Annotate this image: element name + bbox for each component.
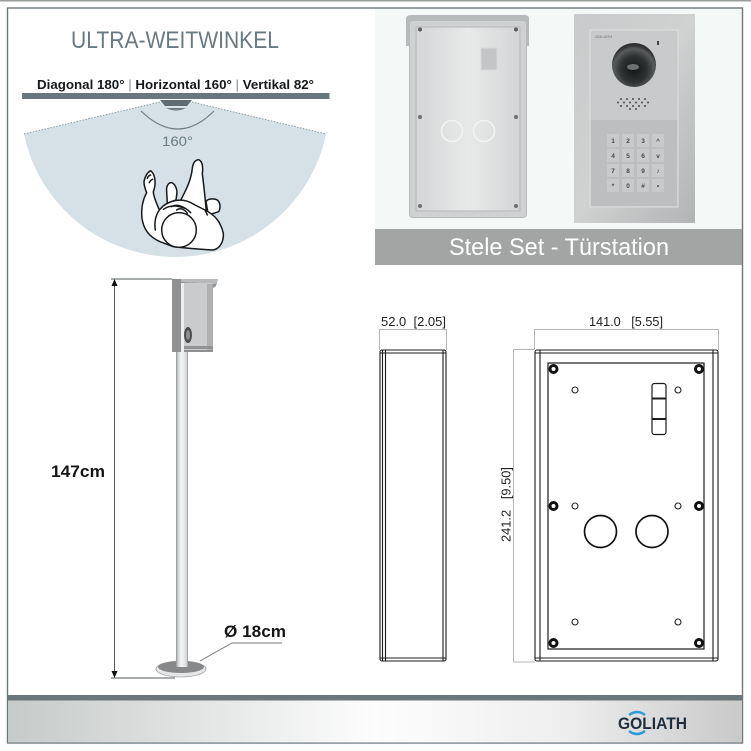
keypad: 4	[611, 153, 615, 160]
keypad: ^	[656, 137, 660, 145]
keypad: 9	[641, 168, 645, 175]
keypad: •	[657, 183, 660, 190]
logo: GOLIATH	[618, 714, 687, 733]
keypad: 5	[626, 153, 630, 160]
width label: 52.0 [2.05]	[381, 314, 446, 329]
top edge line	[0, 0, 751, 2]
keypad: #	[641, 183, 645, 190]
base plate	[156, 652, 206, 677]
keypad: 3	[641, 138, 645, 145]
status led	[657, 41, 659, 45]
dotted field of view edges	[24, 102, 326, 134]
keypad: 0	[626, 183, 630, 190]
speaker	[617, 98, 649, 110]
caption band	[375, 229, 742, 265]
height label: 147cm	[51, 463, 105, 481]
caption band: Stele Set - Türstation	[449, 234, 669, 261]
camera lens	[612, 43, 656, 87]
brand mark: GOLIATH	[595, 34, 612, 39]
keypad: ♪	[656, 168, 660, 175]
title: ULTRA-WEITWINKEL	[71, 27, 279, 54]
height label: 241.2 [9.50]	[498, 467, 514, 542]
footer gradient	[8, 700, 742, 742]
diameter label: Ø 18cm	[224, 623, 286, 641]
keypad: 6	[641, 153, 645, 160]
panel: side view drawing	[380, 314, 446, 661]
small holes	[572, 387, 681, 625]
pole	[176, 352, 188, 670]
cable slot	[652, 384, 666, 434]
angle arc	[141, 111, 214, 129]
photo panel background	[375, 8, 742, 229]
angle label: 160°	[162, 133, 193, 149]
housing outline	[535, 350, 718, 661]
diameter leader	[200, 643, 282, 661]
front panel photo	[574, 14, 695, 223]
camera icon	[160, 100, 192, 110]
panel: ultra wide angle	[22, 27, 330, 257]
viewing angles text: Diagonal 180° | Horizontal 160° | Vertikal 82°	[37, 77, 314, 92]
width dimension lines	[380, 330, 446, 350]
mounted housing	[172, 279, 218, 352]
footer dark band	[8, 695, 742, 700]
side outline	[380, 350, 446, 661]
mounting screws	[550, 366, 702, 646]
back housing photo	[406, 15, 529, 218]
cable holes	[584, 516, 668, 548]
field of view sector	[24, 102, 326, 257]
height dimension	[111, 279, 175, 678]
keypad: v	[656, 153, 660, 160]
dimension lines	[514, 330, 718, 662]
panel: front view drawing	[498, 314, 718, 662]
keypad: 1	[611, 138, 615, 145]
panel: door station photos	[375, 14, 742, 265]
keypad: 7	[611, 168, 615, 175]
wall bar	[22, 93, 330, 99]
width label: 141.0 [5.55]	[589, 314, 663, 329]
keypad	[607, 134, 664, 192]
icon: person from above	[142, 160, 223, 250]
footer	[8, 695, 742, 742]
keypad: 2	[626, 138, 630, 145]
keypad: *	[612, 183, 615, 190]
panel: pole with dimensions	[51, 279, 286, 678]
keypad: 8	[626, 168, 630, 175]
